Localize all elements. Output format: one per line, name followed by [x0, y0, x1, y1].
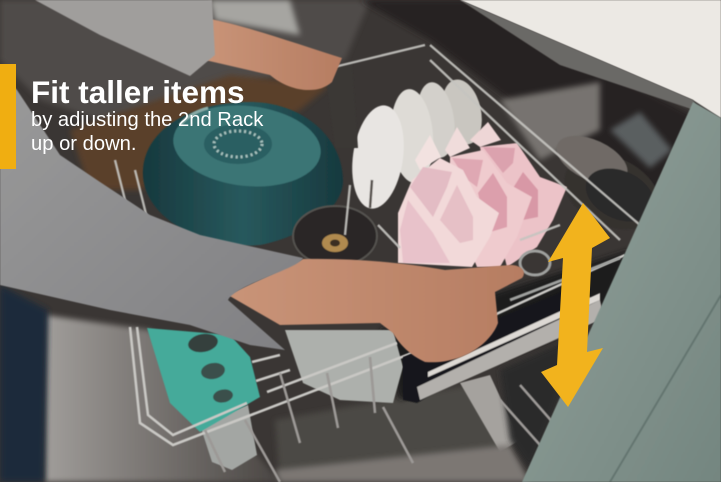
pink divided plates — [398, 122, 567, 267]
blender blade — [293, 206, 377, 266]
rack slide rail — [403, 280, 604, 403]
forearm and hand on rack — [228, 259, 524, 362]
countertop — [460, 0, 721, 118]
lower rack wires — [130, 255, 625, 482]
green-grey door panel — [522, 102, 721, 482]
upper right arm holding handle — [205, 18, 342, 90]
yellow double-headed arrow — [541, 203, 610, 407]
white plates — [346, 76, 487, 212]
caption heading: Fit taller items — [31, 74, 245, 110]
middle pink plate — [445, 127, 532, 267]
glass jar in lower rack — [285, 330, 403, 403]
handle wire clip — [510, 251, 620, 300]
caption body text — [31, 109, 264, 155]
teal bowl — [143, 98, 343, 245]
yellow accent bar — [0, 64, 16, 169]
dark stacked plates at rear — [549, 126, 672, 244]
front pink plate — [398, 135, 499, 267]
bottle bottom — [200, 405, 257, 470]
caption body text: up or down. — [31, 133, 136, 155]
rear pink plate — [470, 122, 567, 267]
handle and glass — [200, 62, 403, 470]
green bottle sleeve — [147, 328, 260, 432]
jeans — [0, 285, 48, 482]
top rack wires — [115, 45, 640, 270]
grey sleeve lower arm — [0, 70, 303, 350]
sleeve on upper arm — [35, 0, 215, 76]
caption body text: by adjusting the 2nd Rack — [31, 109, 263, 131]
